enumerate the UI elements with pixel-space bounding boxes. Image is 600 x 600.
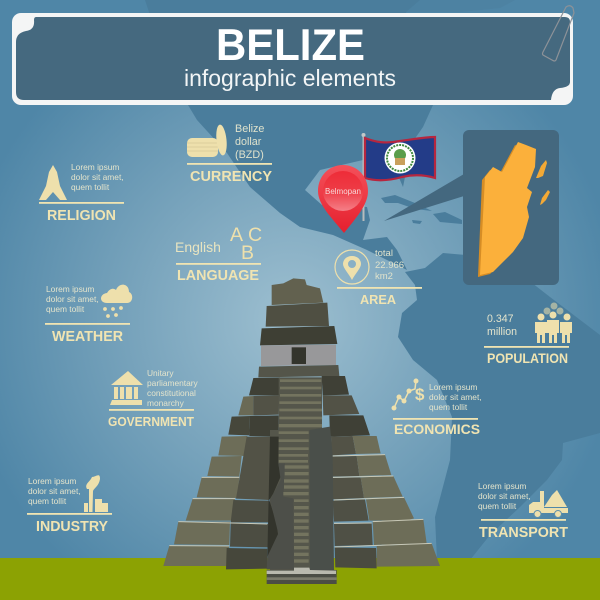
- transport text: quem tollit: [478, 501, 517, 511]
- section: area: [335, 248, 422, 307]
- government heading: GOVERNMENT: [108, 415, 194, 429]
- left inner tiers: [226, 437, 271, 569]
- area heading: AREA: [360, 292, 397, 307]
- religion text: dolor sit amet,: [71, 172, 124, 182]
- section: weather: [45, 284, 132, 345]
- temple base: [267, 568, 337, 584]
- section: currency: [187, 123, 272, 185]
- area text: total: [375, 248, 393, 259]
- left tiers: [163, 436, 247, 566]
- religion text: Lorem ipsum: [71, 162, 119, 172]
- industry text: Lorem ipsum: [28, 476, 76, 486]
- icon: government building: [110, 371, 143, 405]
- icon: dump truck: [529, 490, 568, 518]
- map pin: Belmopan: [318, 165, 368, 233]
- callout pointer: [384, 174, 464, 221]
- religion text: quem tollit: [71, 182, 110, 192]
- section: language: [175, 224, 262, 284]
- icon: rain cloud: [101, 285, 132, 318]
- banner frame: [12, 13, 573, 105]
- transport text: Lorem ipsum: [478, 481, 526, 491]
- icon: coins: [187, 124, 228, 157]
- icon: growth chart: [392, 379, 418, 410]
- government text: Unitary: [147, 368, 174, 378]
- section: economics: [392, 379, 482, 437]
- icon: letters: A: [230, 224, 243, 246]
- language text: English: [175, 239, 221, 255]
- weather heading: WEATHER: [52, 329, 124, 345]
- government text: constitutional: [147, 388, 196, 398]
- government text: parliamentary: [147, 378, 199, 388]
- government text: monarchy: [147, 398, 185, 408]
- industry text: quem tollit: [28, 496, 67, 506]
- section: industry: [27, 475, 112, 535]
- weather text: dolor sit amet,: [46, 294, 99, 304]
- area text: km2: [375, 271, 393, 282]
- weather text: Lorem ipsum: [46, 284, 94, 294]
- icon: people: [535, 302, 572, 343]
- currency text: (BZD): [235, 149, 264, 161]
- icon: flag: [362, 133, 435, 221]
- transport text: dolor sit amet,: [478, 491, 531, 501]
- Belize shape: [480, 142, 536, 275]
- central stairway: [267, 377, 334, 570]
- title: BELIZE: [216, 21, 365, 70]
- title banner: [12, 6, 574, 105]
- icon: location circle: [335, 250, 369, 284]
- industry heading: INDUSTRY: [36, 519, 108, 535]
- currency text: dollar: [235, 136, 262, 148]
- transport heading: TRANSPORT: [479, 525, 568, 541]
- language heading: LANGUAGE: [177, 268, 259, 284]
- banner panel: [16, 17, 570, 100]
- population text: million: [487, 326, 517, 338]
- religion heading: RELIGION: [47, 208, 116, 224]
- population text: 0.347: [487, 313, 514, 325]
- pin label: Belmopan: [325, 187, 361, 196]
- ground: [0, 558, 600, 600]
- cayes: [536, 160, 547, 178]
- section: religion: [39, 162, 124, 224]
- currency text: Belize: [235, 123, 264, 135]
- section: economics: $: [415, 385, 425, 404]
- panel: country map: [463, 130, 559, 285]
- weather text: quem tollit: [46, 304, 85, 314]
- industry text: dolor sit amet,: [28, 486, 81, 496]
- ledges: [169, 455, 432, 547]
- pyramid temple: [163, 278, 440, 584]
- economics text: dolor sit amet,: [429, 392, 482, 402]
- icon: letters: C: [248, 224, 262, 246]
- temple chamber: [261, 345, 336, 366]
- area text: 22.966: [375, 260, 404, 271]
- icon: letters: B: [241, 242, 254, 264]
- economics heading: ECONOMICS: [394, 421, 480, 437]
- section: population: [484, 302, 572, 366]
- section: transport: [478, 481, 568, 541]
- map shadow: [478, 145, 533, 277]
- upper tiers: [228, 376, 370, 437]
- icon: factory: [84, 475, 108, 512]
- icon: letters: [230, 224, 262, 264]
- economics text: quem tollit: [429, 402, 468, 412]
- section: government: [108, 368, 199, 429]
- right tiers: [331, 436, 440, 568]
- icon: paperclip: [542, 6, 574, 61]
- roof comb: [272, 278, 323, 305]
- flag cloth: [365, 137, 435, 180]
- icon: praying hands: [39, 165, 67, 200]
- currency heading: CURRENCY: [190, 169, 272, 185]
- population heading: POPULATION: [487, 351, 568, 366]
- subtitle: infographic elements: [184, 65, 396, 91]
- world map: [145, 0, 600, 560]
- economics text: Lorem ipsum: [429, 382, 477, 392]
- flag emblem: [384, 142, 416, 174]
